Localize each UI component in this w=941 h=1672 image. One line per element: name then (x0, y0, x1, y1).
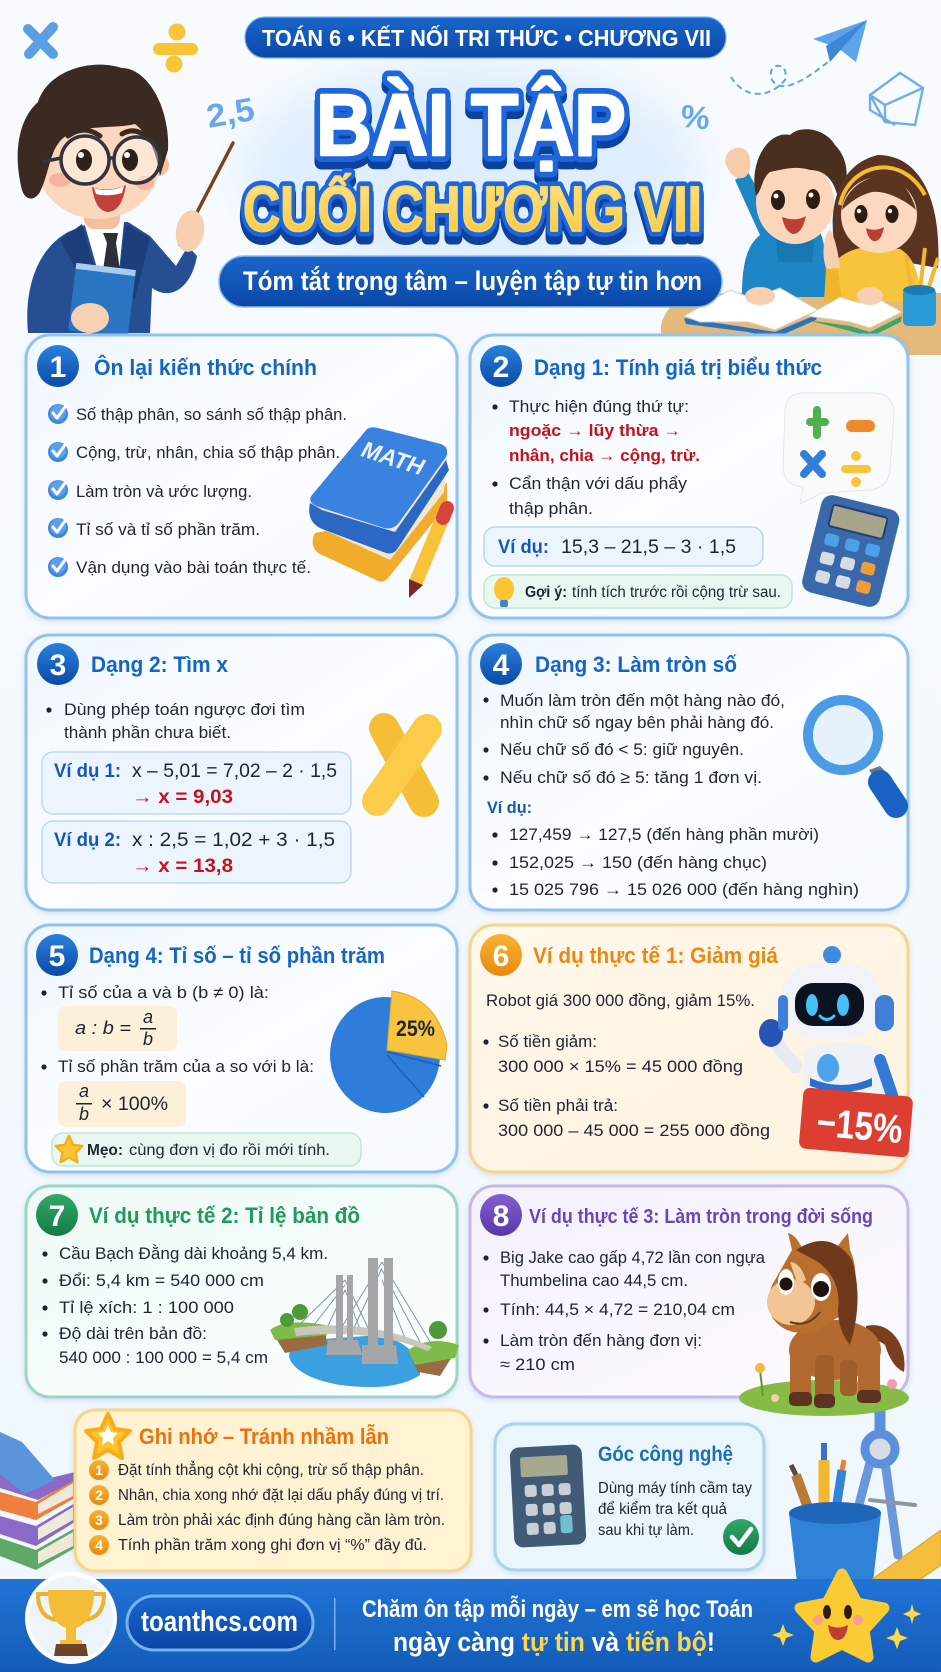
heading: Ôn lại kiến thức chính (94, 355, 317, 380)
number badge 5 (36, 934, 78, 976)
main title line 2: CUỐI CHƯƠNG VII (243, 173, 702, 245)
percentage definition: Tỉ số phần trăm của a so với b là: (58, 1057, 314, 1076)
horse facts (483, 1248, 766, 1374)
rule text: thành phần chưa biết. (64, 723, 231, 742)
open books on desk (684, 287, 902, 338)
example 2 box: → x = 13,8 (132, 856, 233, 877)
panel 3: find x (26, 635, 457, 910)
numbered list: 2 (95, 1487, 103, 1503)
rounding rules (483, 691, 785, 787)
icon: star with white centre (86, 1414, 130, 1458)
pencil cup (903, 248, 938, 326)
discount calculations (483, 991, 770, 1140)
examples (487, 798, 859, 899)
hair (18, 65, 168, 199)
example 1 box: → x = 9,03 (132, 787, 233, 808)
tail (864, 1325, 905, 1372)
icon: magnifying glass (808, 700, 896, 806)
icon: paper plane (813, 20, 867, 62)
number badge 8 (480, 1194, 522, 1236)
number badge 1: 1 (50, 351, 66, 384)
bridge calculations: Đổi: 5,4 km = 540 000 cm (59, 1271, 264, 1290)
website pill (127, 1596, 313, 1650)
checklist: Tỉ số và tỉ số phần trăm. (76, 520, 260, 539)
compass (855, 1410, 915, 1555)
ratio definition: b (143, 1029, 153, 1049)
pencils (791, 1443, 844, 1522)
panel 4: rounding (470, 635, 908, 910)
examples: 127,459 → 127,5 (đến hàng phần mười) (509, 825, 819, 844)
dashed flight path (731, 62, 828, 94)
example 2 box: x : 2,5 = 1,02 + 3 · 1,5 (132, 830, 335, 851)
rules text (492, 397, 700, 518)
panel 8: rounding in real life (470, 1186, 908, 1397)
icon: star (56, 1136, 82, 1162)
header illustrations and title (18, 17, 941, 355)
icon: check badge (723, 1519, 759, 1555)
horse facts: Tính: 44,5 × 4,72 = 210,04 cm (500, 1300, 735, 1319)
icon: divide sign (153, 24, 198, 72)
rounding rules: Nếu chữ số đó < 5: giữ nguyên. (500, 740, 744, 759)
horse facts: Làm tròn đến hàng đơn vị: (500, 1331, 702, 1350)
ratio definition: a (143, 1007, 153, 1027)
discount tag: −15% (815, 1101, 904, 1152)
number badge 2: 2 (493, 351, 509, 384)
rule text (46, 700, 305, 742)
numbered list: Đặt tính thẳng cột khi cộng, trừ số thập phân. (118, 1461, 424, 1479)
bridge calculations: 540 000 : 100 000 = 5,4 cm (59, 1348, 268, 1367)
flowers (755, 1363, 897, 1402)
ratio definition: Tỉ số của a và b (b ≠ 0) là: (58, 983, 269, 1002)
blue book (68, 263, 136, 338)
subtitle pill (219, 256, 722, 307)
main title line 2: CUỐI CHƯƠNG VII (243, 180, 702, 252)
icon: star mascot (800, 1574, 884, 1657)
heading: Ví dụ thực tế 2: Tỉ lệ bản đồ (89, 1203, 360, 1228)
main title line 1: BÀI TẬP (316, 77, 626, 174)
footer banner (0, 1574, 941, 1672)
divider line (334, 1598, 336, 1650)
heading: Dạng 2: Tìm x (91, 652, 229, 677)
mouth (92, 185, 126, 212)
robot character (759, 946, 894, 1095)
top pill: course label (245, 17, 726, 58)
icon: cube (870, 73, 923, 125)
bridge calculations: Tỉ lệ xích: 1 : 100 000 (59, 1298, 234, 1317)
eyes (76, 149, 92, 171)
top pill: course label: TOÁN 6 • KẾT NỐI TRI THỨC • CHƯƠNG VII (262, 24, 711, 51)
heading: Ví dụ thực tế 1: Giảm giá (533, 943, 779, 968)
checklist: Làm tròn và ước lượng. (76, 482, 252, 501)
icon: light bulb (494, 577, 514, 607)
ruler (868, 1530, 941, 1604)
number badge 7 (36, 1194, 78, 1236)
percentage definition: a (79, 1081, 89, 1101)
hint box: Gợi ý: (525, 584, 567, 601)
numbered list: Nhân, chia xong nhớ đặt lại dấu phẩy đúng vị trí. (118, 1487, 444, 1504)
number badge 7: 7 (49, 1200, 65, 1233)
panel 7: map scale (26, 1186, 459, 1397)
number badge 8: 8 (493, 1200, 509, 1233)
icon: big letter X (377, 728, 427, 802)
rules text: thập phân. (509, 499, 593, 518)
example box (484, 527, 763, 566)
callout: remember (75, 1410, 471, 1571)
main title line 1: BÀI TẬP (316, 77, 626, 174)
numbered list: 1 (95, 1462, 103, 1478)
rules text: ngoặc → lũy thừa → (509, 421, 681, 440)
title glow (240, 60, 700, 280)
head (26, 153, 50, 177)
discount calculations: Số tiền phải trả: (498, 1096, 618, 1115)
icon: calculator (800, 493, 902, 609)
pointer stick (180, 143, 233, 245)
footer message: Chăm ôn tập mỗi ngày – em sẽ học Toán (362, 1595, 753, 1623)
rounding rules: Nếu chữ số đó ≥ 5: tăng 1 đơn vị. (500, 768, 762, 787)
icon: stacked math books: MATH (359, 436, 428, 480)
rule text: Dùng phép toán ngược đơi tìm (64, 700, 305, 719)
percentage definition: b (79, 1104, 89, 1124)
sparkles (772, 1604, 921, 1649)
number badge 1 (37, 345, 79, 387)
rounding rules: nhìn chữ số ngay bên phải hàng đó. (500, 713, 774, 732)
heading: Dạng 1: Tính giá trị biểu thức (534, 355, 822, 380)
bridge calculations (42, 1244, 328, 1367)
number badge 3: 3 (50, 649, 66, 682)
pencil cup (789, 1502, 881, 1582)
heading: Góc công nghệ (598, 1443, 733, 1466)
horse body and legs (789, 1320, 881, 1400)
examples: 152,025 → 150 (đến hàng chục) (509, 853, 767, 872)
number badge 4: 4 (493, 649, 510, 682)
rules text: Thực hiện đúng thứ tự: (509, 397, 689, 416)
rules text: Cẩn thận với dấu phẩy (509, 474, 688, 493)
chart: pie chart 25% (330, 991, 447, 1113)
hint box (484, 575, 792, 608)
subtitle pill: Tóm tắt trọng tâm – luyện tập tự tin hơn (243, 265, 702, 296)
numbered list: 3 (95, 1512, 103, 1528)
discount calculations: 300 000 × 15% = 45 000 đồng (498, 1057, 743, 1076)
discount calculations: 300 000 – 45 000 = 255 000 đồng (498, 1121, 770, 1140)
chart: pie chart 25%: 25% (396, 1016, 435, 1041)
tip box (52, 1133, 361, 1166)
horse facts: ≈ 210 cm (500, 1355, 575, 1374)
right decorative stationery (789, 1410, 941, 1604)
panel 2: expressions (470, 335, 908, 618)
teacher character (18, 65, 233, 338)
bridge calculations: Cầu Bạch Đằng dài khoảng 5,4 km. (59, 1244, 328, 1263)
numbered list: 4 (95, 1537, 103, 1553)
trophy badge (27, 1574, 115, 1662)
example 1 box (42, 752, 351, 814)
number badge 2 (480, 345, 522, 387)
rounding rules: Muốn làm tròn đến một hàng nào đó, (500, 691, 785, 710)
panel 6: discount example (470, 925, 913, 1172)
checklist: Vận dụng vào bài toán thực tế. (76, 558, 311, 577)
example box: Ví dụ: (498, 537, 549, 558)
horse facts: Big Jake cao gấp 4,72 lần con ngựa (500, 1248, 766, 1267)
tech tip text (598, 1480, 752, 1539)
heading: Ví dụ thực tế 3: Làm tròn trong đời sống (529, 1205, 873, 1228)
glasses (42, 136, 162, 184)
tip box: cùng đơn vị đo rồi mới tính. (129, 1142, 330, 1159)
footer message: ngày càng tự tin và tiến bộ! (393, 1627, 715, 1657)
example 2 box: Ví dụ 2: (54, 830, 121, 851)
website pill: toanthcs.com (141, 1606, 298, 1638)
horse facts: Thumbelina cao 44,5 cm. (500, 1271, 688, 1290)
example 1 box: x – 5,01 = 7,02 – 2 · 1,5 (132, 761, 337, 782)
tech tip text: sau khi tự làm. (598, 1522, 694, 1539)
tech tip text: Dùng máy tính cầm tay (598, 1480, 752, 1497)
number badge 3 (37, 643, 79, 685)
tech tip text: để kiểm tra kết quả (598, 1501, 727, 1518)
numbered list (89, 1460, 445, 1555)
callout: technology corner (495, 1424, 764, 1570)
percent icon: % (679, 98, 712, 136)
main title line 1: BÀI TẬP (316, 84, 626, 181)
rules text: nhân, chia → cộng, trừ. (509, 446, 700, 465)
checklist: Cộng, trừ, nhân, chia số thập phân. (76, 443, 340, 462)
heading: Dạng 4: Tỉ số – tỉ số phần trăm (89, 943, 385, 968)
checklist: Số thập phân, so sánh số thập phân. (76, 405, 347, 424)
hint box: tính tích trước rồi cộng trừ sau. (572, 584, 781, 601)
discount calculations: Robot giá 300 000 đồng, giảm 15%. (486, 991, 755, 1010)
percentage definition: × 100% (101, 1094, 168, 1115)
numbered list: Tính phần trăm xong ghi đơn vị “%” đầy đủ. (118, 1537, 427, 1554)
horse head (769, 1233, 856, 1333)
heading: Dạng 3: Làm tròn số (535, 652, 737, 677)
ratio definition: a : b = (75, 1018, 131, 1038)
ratio definition (41, 983, 269, 1051)
example 2 box (42, 821, 351, 883)
icon: speech bubble with operators (783, 393, 894, 504)
icon: dark calculator (509, 1444, 587, 1548)
percentage definition (41, 1057, 314, 1127)
footer message (362, 1595, 753, 1657)
example 1 box: Ví dụ 1: (54, 761, 121, 782)
decimal number icon: 2,5 (204, 90, 257, 135)
number badge 6 (480, 934, 522, 976)
bridge calculations: Độ dài trên bản đồ: (59, 1324, 207, 1343)
heading: Ghi nhớ – Tránh nhầm lẫn (139, 1424, 389, 1449)
horse character (739, 1233, 909, 1416)
icon: multiply sign (28, 27, 53, 54)
panel 1: review (26, 335, 457, 618)
boy character (725, 129, 847, 297)
desk (661, 293, 941, 355)
checklist (48, 404, 347, 577)
examples: Ví dụ: (487, 798, 532, 817)
eyebrows (68, 130, 148, 138)
panel 5: ratio (26, 925, 457, 1172)
raised hand (173, 208, 207, 254)
main title line 2: CUỐI CHƯƠNG VII (243, 173, 702, 245)
number badge 4 (480, 643, 522, 685)
left decorative book stack (0, 1432, 75, 1570)
number badge 5: 5 (49, 940, 65, 973)
numbered list: Làm tròn phải xác định đúng hàng cần làm tròn. (118, 1512, 445, 1529)
girl character (823, 155, 938, 302)
discount calculations: Số tiền giảm: (498, 1032, 597, 1051)
number badge 6: 6 (493, 940, 509, 973)
icon: cable-stayed bridge (270, 1258, 459, 1387)
grass patch (739, 1380, 909, 1416)
icon: stacked math books (309, 427, 449, 598)
example box: 15,3 – 21,5 – 3 · 1,5 (561, 537, 736, 558)
examples: 15 025 796 → 15 026 000 (đến hàng nghìn) (509, 880, 859, 899)
discount tag (799, 1087, 913, 1158)
tip box: Mẹo: (87, 1142, 123, 1159)
